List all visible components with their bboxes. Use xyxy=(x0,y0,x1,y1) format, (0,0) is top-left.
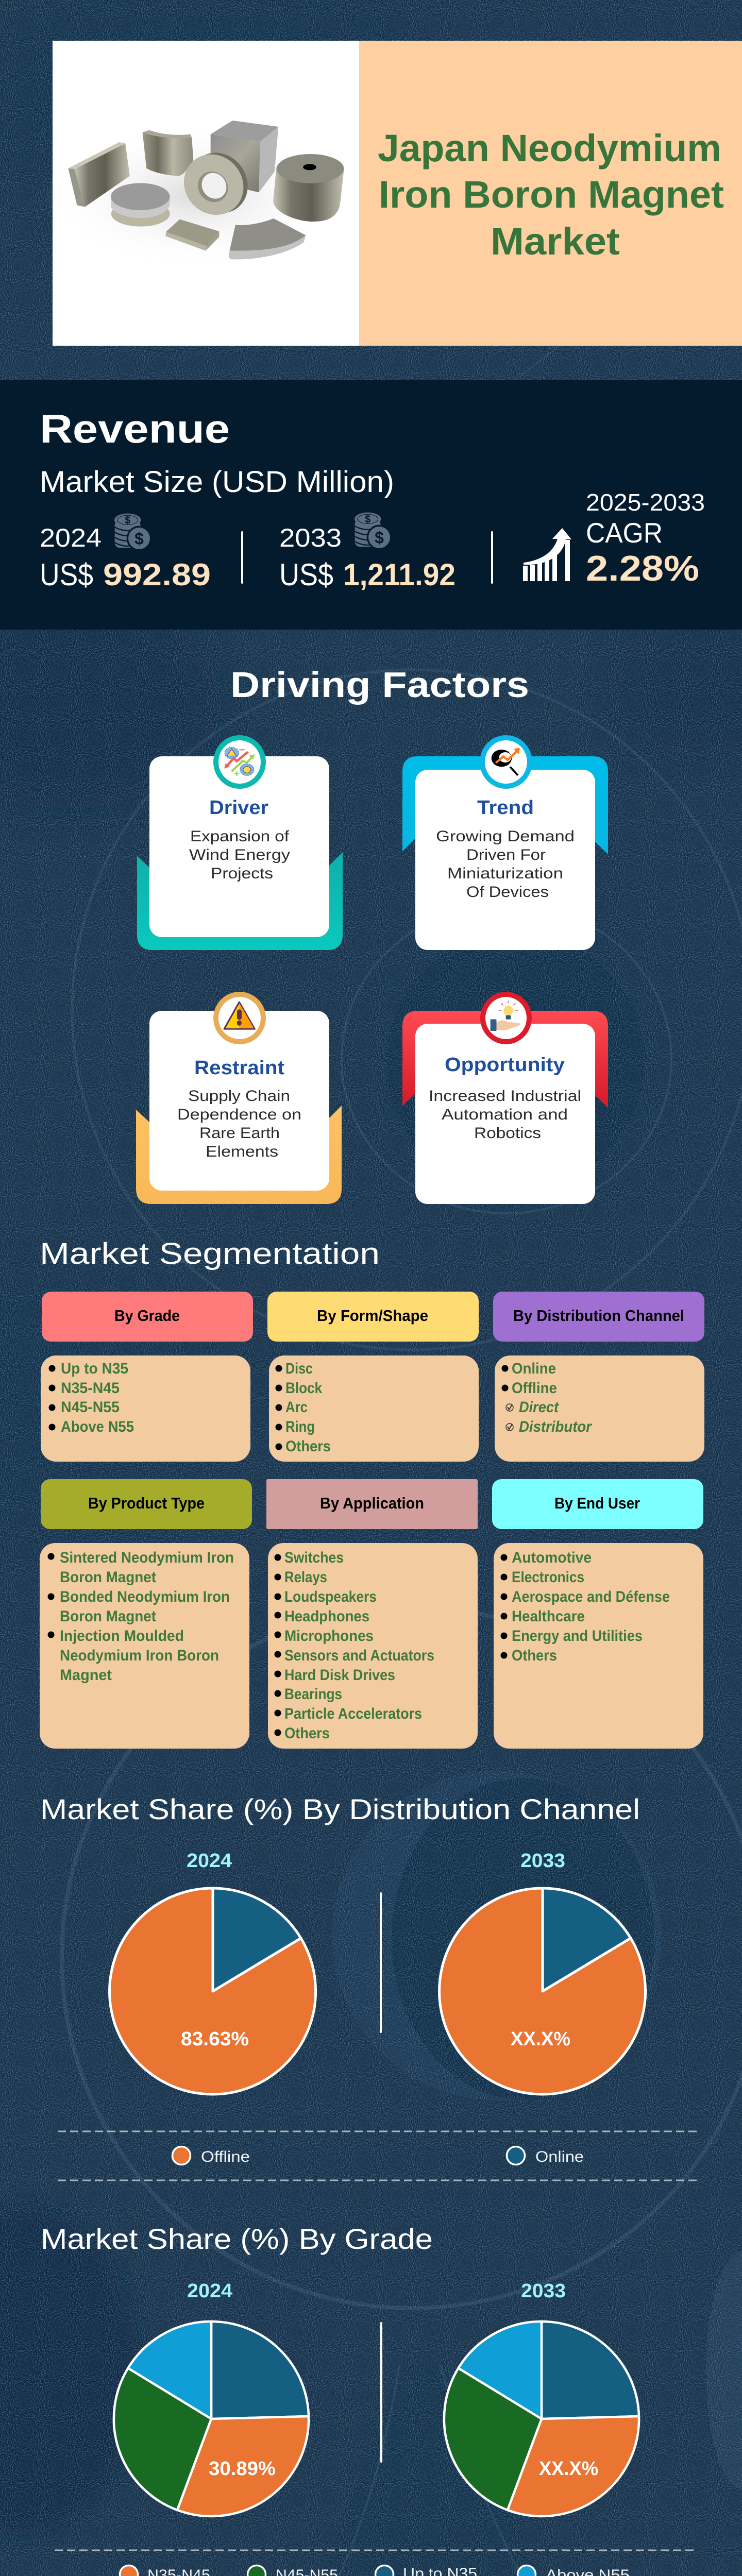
list: end users: Electronics xyxy=(512,1569,584,1586)
list: product types: Injection Moulded xyxy=(60,1628,184,1645)
list: channels xyxy=(502,1360,593,1435)
icon: driver xyxy=(216,738,263,786)
icon: coins 2033: $ xyxy=(375,529,384,547)
CAGR: 2.28% xyxy=(586,548,699,588)
opportunity text: Increased Industrial xyxy=(429,1088,581,1105)
2033 value: US$ xyxy=(279,557,333,592)
list: end users: Automotive xyxy=(512,1549,592,1566)
chart: grade 2024 xyxy=(114,2280,309,2516)
segment: by form/shape: By Form/Shape xyxy=(317,1307,428,1325)
chart: distribution 2033 xyxy=(440,1850,646,2094)
trend text: Growing Demand xyxy=(436,828,575,845)
list: channels: Online xyxy=(512,1360,556,1377)
list: end users: Aerospace and Défense xyxy=(512,1588,670,1605)
list: applications: Hard Disk Drives xyxy=(284,1667,395,1684)
heading: share by distribution channel: Market Share (%) By Distribution Channel xyxy=(40,1793,640,1825)
segment: by distribution channel xyxy=(493,1292,704,1462)
icon: opportunity xyxy=(483,994,529,1042)
segment: by application xyxy=(266,1479,478,1749)
list: applications: Particle Accelerators xyxy=(284,1705,422,1722)
trend text: Driven For xyxy=(466,846,546,863)
panel: restraint xyxy=(136,994,342,1204)
segment: by grade xyxy=(41,1292,253,1462)
legend: distribution channel: Offline xyxy=(201,2148,250,2165)
2033 value: 1,211.92 xyxy=(343,557,456,592)
segment: by grade: By Grade xyxy=(114,1307,180,1325)
opportunity text: Robotics xyxy=(474,1125,541,1142)
restraint text xyxy=(177,1088,301,1160)
list: shapes: Others xyxy=(285,1438,331,1455)
heading: share by grade: Market Share (%) By Grade xyxy=(41,2223,433,2255)
trend text: Miniaturization xyxy=(447,865,563,882)
market size label: Market Size (USD Million) xyxy=(40,465,394,499)
panel: trend xyxy=(402,738,608,950)
list: channels: Direct xyxy=(519,1399,560,1416)
list: product types: Neodymium Iron Boron xyxy=(60,1647,219,1664)
trend text: Of Devices xyxy=(466,884,549,901)
list: shapes: Ring xyxy=(285,1418,315,1435)
title: Market xyxy=(491,220,620,263)
title: Japan Neodymium xyxy=(378,127,721,170)
list: applications: Sensors and Actuators xyxy=(284,1647,434,1664)
list: shapes: Arc xyxy=(285,1399,308,1416)
driver heading: Driver xyxy=(209,797,268,819)
trend text xyxy=(436,828,575,901)
list: applications xyxy=(274,1549,434,1742)
restraint text: Elements xyxy=(206,1143,278,1160)
CAGR: 2025-2033 xyxy=(586,489,705,516)
list: applications: Bearings xyxy=(284,1686,342,1703)
restraint text: Supply Chain xyxy=(188,1088,290,1105)
segment: by end user: By End User xyxy=(554,1494,640,1512)
list: applications: Switches xyxy=(284,1549,344,1566)
list: applications: Loudspeakers xyxy=(284,1588,377,1605)
chart: distribution 2024: 2024 xyxy=(187,1850,232,1872)
segment: by product type xyxy=(40,1479,252,1749)
segment: by form/shape xyxy=(267,1292,479,1462)
heading: market segmentation: Market Segmentation xyxy=(40,1237,380,1270)
legend: grade xyxy=(55,2550,700,2576)
list: grades: Above N55 xyxy=(61,1418,134,1435)
chart: grade 2024: 2024 xyxy=(187,2280,232,2302)
list: grades: Up to N35 xyxy=(61,1360,128,1377)
title xyxy=(378,127,724,263)
list: product types: Magnet xyxy=(60,1667,112,1684)
2024 value: 2024 xyxy=(40,523,102,552)
panel: opportunity xyxy=(402,994,608,1204)
list: channels: Offline xyxy=(512,1380,557,1397)
icon: trend xyxy=(482,738,530,786)
2024 value: US$ xyxy=(40,557,93,592)
list: product types xyxy=(47,1549,234,1684)
list: applications: Relays xyxy=(284,1569,327,1586)
2033 value xyxy=(279,523,456,592)
opportunity text: Automation and xyxy=(442,1106,568,1123)
list: product types: Boron Magnet xyxy=(60,1569,156,1586)
list: end users xyxy=(501,1549,670,1664)
list: applications: Others xyxy=(284,1725,330,1742)
title: Iron Boron Magnet xyxy=(379,173,724,216)
restraint text: Rare Earth xyxy=(199,1125,280,1142)
chart: grade 2024: 30.89% xyxy=(209,2458,276,2480)
revenue heading: Revenue xyxy=(40,406,230,451)
2033 value: 2033 xyxy=(279,523,342,552)
2024 value: 992.89 xyxy=(103,557,211,592)
list: shapes: Block xyxy=(285,1380,322,1397)
icon: coins 2024: $ xyxy=(134,530,144,548)
chart: distribution 2024: 83.63% xyxy=(181,2028,249,2050)
icon: coins 2024: $ xyxy=(125,515,130,527)
icon: warning xyxy=(216,994,263,1042)
segment: by product type: By Product Type xyxy=(88,1494,205,1512)
icon: coins 2024 xyxy=(114,514,151,551)
CAGR: CAGR xyxy=(586,517,663,549)
chart: distribution 2033: 2033 xyxy=(520,1850,565,1872)
opportunity text xyxy=(429,1088,581,1142)
list: applications: Headphones xyxy=(284,1608,369,1625)
panel: driver xyxy=(137,738,343,950)
icon: coins 2033 xyxy=(355,513,392,550)
driver text xyxy=(189,828,290,882)
restraint text: Dependence on xyxy=(177,1106,301,1123)
list: product types: Sintered Neodymium Iron xyxy=(60,1549,234,1566)
title panel xyxy=(359,41,742,346)
2024 value xyxy=(40,523,211,592)
chart: grade 2033 xyxy=(444,2280,639,2516)
list: shapes xyxy=(275,1360,331,1455)
list: shapes: Disc xyxy=(285,1360,313,1377)
list: applications: Microphones xyxy=(284,1628,374,1645)
list: end users: Energy and Utilities xyxy=(512,1628,643,1645)
list: channels: Distributor xyxy=(519,1418,593,1435)
list: end users: Others xyxy=(512,1647,557,1664)
chart: grade 2033: XX.X% xyxy=(539,2458,598,2480)
heading: driving factors: Driving Factors xyxy=(230,665,529,705)
list: grades xyxy=(48,1360,134,1435)
list: grades: N45-N55 xyxy=(61,1399,120,1416)
trend heading: Trend xyxy=(477,797,534,819)
list: end users: Healthcare xyxy=(512,1608,585,1625)
driver text: Wind Energy xyxy=(189,846,290,863)
driver text: Projects xyxy=(211,865,273,882)
CAGR xyxy=(586,489,705,588)
icon: coins 2033: $ xyxy=(365,514,370,526)
legend: distribution channel: Online xyxy=(535,2148,584,2165)
legend: distribution channel xyxy=(58,2131,700,2180)
list: product types: Boron Magnet xyxy=(60,1608,156,1625)
segment: by distribution channel: By Distribution Channel xyxy=(513,1307,684,1325)
list: product types: Bonded Neodymium Iron xyxy=(60,1588,230,1605)
segment: by application: By Application xyxy=(320,1494,424,1512)
chart: distribution 2033: XX.X% xyxy=(511,2028,570,2050)
chart: grade 2033: 2033 xyxy=(521,2280,566,2302)
restraint heading: Restraint xyxy=(194,1057,284,1079)
magnet photo xyxy=(45,121,344,268)
driver text: Expansion of xyxy=(190,828,290,845)
icon: growth arrow xyxy=(523,528,571,581)
chart: distribution 2024 xyxy=(110,1850,316,2094)
list: grades: N35-N45 xyxy=(61,1380,120,1397)
hero banner xyxy=(45,41,742,346)
opportunity heading: Opportunity xyxy=(445,1054,565,1076)
panel: revenue xyxy=(0,380,742,630)
segment: by end user xyxy=(492,1479,703,1749)
photo panel xyxy=(53,41,359,346)
